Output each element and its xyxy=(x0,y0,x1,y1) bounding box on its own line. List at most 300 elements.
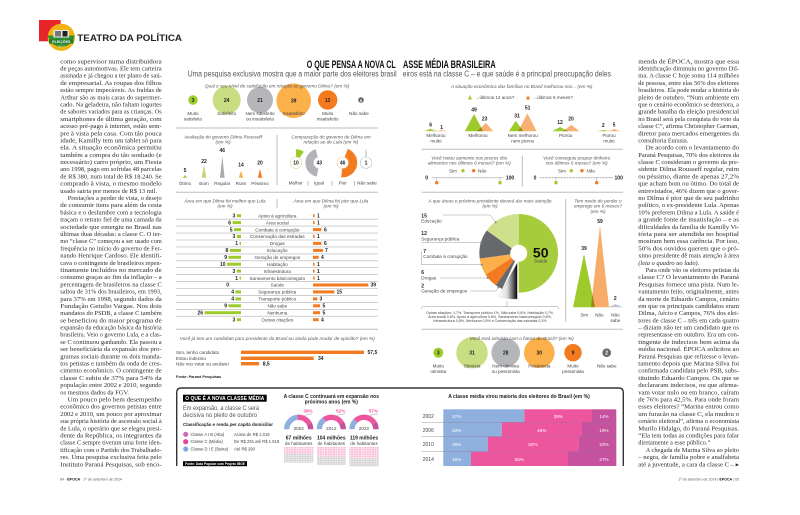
right article column: vantamento feito, originalmente, antes xyxy=(638,289,739,296)
row labels: Não sabe xyxy=(267,304,288,308)
right article column: tituindo Eduardo Campos. Os que se xyxy=(638,375,739,382)
bubble chart: optimism about Brazil's future: otimista xyxy=(430,369,447,374)
right article column: que acham bom ou ótimo. Do total de xyxy=(638,181,739,188)
class legend: Acima de R$ 1.019 xyxy=(234,432,270,437)
bar chart: candidate decision: Estou indeciso xyxy=(176,356,206,361)
left article column: se C continuou ganhando. Ela passou a xyxy=(60,339,162,346)
orange bar values: 1 xyxy=(317,220,320,226)
row labels: Nenhuma xyxy=(267,310,288,315)
infographic subtitle xyxy=(188,69,611,78)
orange bar values: 7 xyxy=(325,248,328,254)
right article column: ou péssimo, diante de apenas 27,2% xyxy=(638,173,740,180)
right article column: dificuldades da família de Kamilly Vi- xyxy=(638,224,739,231)
right article column: tamento depois que Marina Silva foi xyxy=(638,360,739,368)
right article column: de 76% para 42,5%. Para onde foram xyxy=(638,396,740,404)
chart: family economic situation triangles: 51 xyxy=(525,106,531,112)
infographic subtitle: Uma pesquisa exclusiva mostra que a maior parte dos eleitores brasil xyxy=(188,69,397,78)
left article column: traçam o retrato fiel de uma camada da xyxy=(60,217,162,224)
stacked bar chart: middle class majority of voters: 16% xyxy=(452,457,461,462)
bubble chart: satisfaction with Dilma government: satisfeito xyxy=(184,116,203,122)
right article column: classe C”, afirma Christopher Garman, xyxy=(638,123,739,130)
left article column: Fundação Getulio Vargas. Nos dois xyxy=(60,303,162,310)
diverging bar chart: areas Dilma better or worse than Lula: (em %) xyxy=(323,204,339,209)
left article column: de Lula, o operário que se elegeu presi- xyxy=(60,425,162,432)
gauge 2002 xyxy=(287,417,311,429)
orange bar values: 39 xyxy=(370,283,376,289)
green bar values: 1 xyxy=(235,276,238,282)
bubble chart: optimism about Brazil's future: Muito xyxy=(567,364,579,368)
green bar values: 8 xyxy=(226,248,229,254)
chart: class C expansion gauges: de habitantes xyxy=(318,441,346,446)
row labels: Saneamento básico/esgoto xyxy=(249,276,306,281)
bubble chart: satisfaction with Dilma government: Insatisfeito xyxy=(283,111,305,116)
chart: family economic situation triangles: muito xyxy=(603,138,615,143)
chart: family economic situation triangles: ...últimos 12 anos? xyxy=(476,95,515,100)
bubble chart: optimism about Brazil's future: 31 xyxy=(469,350,475,356)
bubble chart: optimism about Brazil's future: 2 xyxy=(605,350,608,356)
spike chart: government evaluation: Ótimo xyxy=(179,180,192,186)
left article column: cado. Na geladeira, não faltam iogurtes xyxy=(60,102,162,108)
orange bar values: 4 xyxy=(321,317,324,323)
panel: what is the new middle class: O QUE É A NOVA CLASSE MÉDIA xyxy=(185,394,265,402)
chart: class C expansion gauges: 67 milhões xyxy=(286,435,312,441)
bubble chart: optimism about Brazil's future: Pessimista xyxy=(528,364,551,368)
right article column: a grande fonte de insatisfação – e as xyxy=(638,217,739,224)
bubble chart: satisfaction with Dilma government: 39 xyxy=(291,98,297,104)
row labels: Outras citações xyxy=(261,317,294,322)
left article column: cimento econômico. O contingente de xyxy=(60,368,162,375)
stacked bar chart: middle class majority of voters: 39% xyxy=(554,414,563,419)
pie chart: priorities for next president: Saúde xyxy=(534,258,548,263)
green bar values: 9 xyxy=(224,255,227,261)
right article column: Paraná Pesquisas, 70% dos eleitores da xyxy=(638,152,739,159)
right article column: ma. A classe C hoje soma 114 milhões xyxy=(638,73,739,80)
right article column: em que os principais candidatos eram xyxy=(638,303,740,310)
orange bar values: 4 xyxy=(321,255,324,261)
bar chart: candidate decision: Sim, tenho candidato xyxy=(176,350,220,355)
left article column: também a compra do tão sonhado (e xyxy=(60,152,162,159)
left article column: usado sairia por menos de R$ 13 mil. xyxy=(60,188,157,195)
pie chart: priorities for next president: (em %) xyxy=(482,204,498,209)
left article column: res. Uma pesquisa exclusiva feita pelo xyxy=(60,454,162,461)
bubble chart: satisfaction with Dilma government: 24 xyxy=(224,98,230,104)
right article column: entrevistados, 46% dizem que o gover- xyxy=(638,188,739,195)
wedge chart: Dilma compared to Lula: Comparação do governo de Dilma em xyxy=(291,134,371,139)
left article column: assinada e já chegou a ter plano de saú- xyxy=(60,73,162,80)
right article column: esses eleitores? “Marina entrou como xyxy=(638,404,740,411)
chart: family economic situation triangles: 1 xyxy=(440,125,443,131)
bubble chart: satisfaction with Dilma government: Nem satisfeito xyxy=(245,111,275,116)
right article column: confirmada candidata pelo PSB, subs- xyxy=(638,368,739,375)
stacked bar chart: middle class majority of voters: 27% xyxy=(599,457,609,462)
chart: family economic situation triangles: Piorou xyxy=(602,133,616,138)
pie labels: Combate à corrupção xyxy=(423,254,468,259)
section heading: TEATRO DA POLÍTICA xyxy=(77,32,182,44)
right article column: identificação diminuiu no governo Dil- xyxy=(638,66,739,72)
pie labels: 12 xyxy=(421,231,427,237)
spike chart: government evaluation xyxy=(179,134,269,186)
bubble chart: optimism about Brazil's future: ou pessimista xyxy=(492,369,520,374)
row labels: Conservação das estradas xyxy=(250,234,305,239)
scale chart: food prices: Não xyxy=(478,168,487,173)
left article column: mandatos do PSDB, a classe C também xyxy=(60,310,163,317)
left article column: mo “classe C” começou a ser usado com xyxy=(60,238,163,245)
right article column: De acordo com o levantamento do xyxy=(646,145,740,152)
green bar values: 26 xyxy=(197,310,203,316)
pie chart: priorities for next president: Outras citações: 1,7%, Transporte público 1%, Não sabe 0,8%, Habitação 0,7%, xyxy=(426,311,554,315)
right article column: que o cenário econômico se deteriora, a xyxy=(638,102,739,108)
chart: family economic situation triangles: 5 xyxy=(613,122,616,128)
right article column: “Ela tem todas as condições para falar xyxy=(638,432,740,440)
right article column: tingente de indecisos bem acima da xyxy=(638,339,739,346)
green bar values: 4 xyxy=(231,297,234,303)
pie chart: priorities for next president: Infraestrutura 0,6%, Nenhuma 0,5% e Conservação das estradas 0,3% xyxy=(433,319,547,323)
bubble chart: optimism about Brazil's future: 30 xyxy=(537,350,542,356)
left article column: os mesmos dados da FGV. xyxy=(60,389,129,396)
right article column: menda de ÉPOCA, mostra que essa xyxy=(638,57,739,65)
chart: class C expansion gauges: 104 milhões xyxy=(317,435,346,441)
right article column: político, o ex-presidente Lula. Apenas xyxy=(638,202,739,209)
chart: family economic situation triangles: Melhorou xyxy=(426,133,446,138)
left article column: tos petistas e também da onda de cres- xyxy=(60,360,162,368)
triangle chart: fear of job loss: Não xyxy=(611,313,620,318)
stacked bar chart: middle class majority of voters xyxy=(422,394,616,466)
class legend xyxy=(183,432,280,452)
spike chart: government evaluation: Avaliação do governo Dilma Rousseff xyxy=(183,134,263,139)
chart: family economic situation triangles: 2 xyxy=(602,123,605,129)
right article column: – diziam não ter um candidato que os xyxy=(637,324,739,332)
pie chart: priorities for next president xyxy=(421,198,558,323)
left article column: smartphones de última geração, com xyxy=(60,116,163,123)
row labels: Segurança pública xyxy=(258,290,297,295)
pie labels: Geração de empregos xyxy=(421,289,468,294)
bar chart: candidate decision: Você já tem um candidato para presidente do Brasil ou ainda pode mudar de opinião? (em %) xyxy=(180,336,375,341)
right article column: um furacão na classe C, ela mudou o xyxy=(638,411,740,418)
bar chart: candidate decision: Não vou votar ou anularei xyxy=(176,362,229,367)
green bar values: 3 xyxy=(233,213,236,219)
panel: what is the new middle class: Em expansão, a classe C será xyxy=(183,405,259,412)
pie labels: 6 xyxy=(421,270,424,276)
right article column: de pessoas, entre elas 56% dos eleitores xyxy=(638,80,739,87)
left article column: Instituto Paraná Pesquisas, sob enco- xyxy=(60,461,162,468)
scale chart: food prices: alimentos nos últimos 6 meses? (em %) xyxy=(428,160,511,165)
bubble chart: satisfaction with Dilma government: 3 xyxy=(192,98,195,104)
left article column: tificação com o Partido dos Trabalhado- xyxy=(60,447,162,454)
right article column: – negra, de família pobre e analfabeta xyxy=(637,454,739,461)
spike chart: government evaluation: 5 xyxy=(184,168,187,174)
chart: family economic situation triangles: 12 xyxy=(557,120,563,126)
left article column: de peças automotivas. Ele tem carteira xyxy=(60,66,162,72)
stacked bar chart: middle class majority of voters: 14% xyxy=(599,414,609,419)
bar chart: candidate decision: 8,5 xyxy=(263,362,270,368)
scale chart: food prices xyxy=(425,155,514,184)
left article column: ser beneficiária da expansão dos pro- xyxy=(60,346,162,353)
right article column: Pesquisas fornece uma pista. Num le- xyxy=(638,281,739,288)
left page footer: 64 · ÉPOCA · 1º de setembro de 2014 xyxy=(60,477,122,482)
row labels: Drogas xyxy=(270,241,285,246)
right article column: mostram bem essa carência. Por isso, xyxy=(638,238,739,245)
wedge chart: Dilma compared to Lula: Não sabe xyxy=(357,181,377,186)
left article column: de consumir itens para além da cesta xyxy=(60,202,162,209)
right article column xyxy=(637,57,740,468)
left article column: classe C subiu de 37% para 54% da xyxy=(60,375,162,382)
right article column: representasse em outubro. Era um con- xyxy=(638,332,739,339)
pie labels: 2 xyxy=(421,284,424,290)
infographic title: ASSE MÉDIA BRASILEIRA xyxy=(403,58,496,71)
left article column: necessário) carro próprio, um Fiesta xyxy=(60,159,162,166)
section badge: Eleições 2014: ELEIÇÕES xyxy=(52,39,71,44)
chart: family economic situation triangles: 49 xyxy=(471,108,477,114)
right article column: sidente Dilma Rousseff regular, ruim xyxy=(638,166,740,173)
left article column: classe C sempre tiveram uma forte iden- xyxy=(60,440,162,447)
stacked bar chart: middle class majority of voters: 33% xyxy=(452,428,461,433)
chart: class C expansion gauges: 2002 xyxy=(294,426,304,431)
orange bar values: 1 xyxy=(317,262,320,268)
scale chart: saving money: nos últimos 6 meses? (em %) xyxy=(546,160,608,165)
right article column: diretor para mercados emergentes da xyxy=(638,130,739,137)
pie chart: priorities for next president: A que áreas o próximo presidente deverá dar mais atenção xyxy=(427,198,552,204)
stacked bar chart: middle class majority of voters: 2006 xyxy=(423,428,434,434)
green bar values: 6 xyxy=(228,220,231,226)
bubble chart: optimism about Brazil's future: Nem otimista xyxy=(492,364,520,368)
gauge 2022 xyxy=(352,417,376,429)
pie chart: priorities for next president: 50 xyxy=(533,245,549,261)
left article column xyxy=(60,58,163,468)
scale chart: food prices: 100 xyxy=(506,175,514,181)
bubble chart: optimism about Brazil's future xyxy=(430,336,617,374)
diverging bar chart: areas Dilma better or worse than Lula: Área em que Dilma foi melhor que Lula xyxy=(183,198,266,204)
stacked bar chart: middle class majority of voters: 46% xyxy=(537,428,546,433)
left article column: cava o contingente de brasileiros repen- xyxy=(60,260,162,267)
wedge chart: Dilma compared to Lula: Pior xyxy=(339,181,347,186)
bubble chart: satisfaction with Dilma government: Satisfeito xyxy=(217,111,237,116)
spike chart: government evaluation: Regular xyxy=(214,181,231,186)
left article column: pre à vista pela casa. Com tão pouca xyxy=(60,130,162,137)
green bar values: 5 xyxy=(230,227,233,233)
left article column: gramas sociais durante os dois manda- xyxy=(60,353,162,360)
green bar values: 9 xyxy=(224,304,227,310)
row labels: Apoio à agricultura xyxy=(258,213,297,218)
chart: class C expansion gauges: 2022 xyxy=(359,426,370,431)
stacked bar chart: middle class majority of voters: 19% xyxy=(599,428,609,433)
orange bar values: 1 xyxy=(317,269,320,275)
right article column: Dilma, Aécio e Campos, 76% dos elei- xyxy=(638,310,739,317)
left article column: sua própria história de ascensão social à xyxy=(60,418,162,425)
bubble chart: satisfaction with Dilma government: Muito xyxy=(187,111,199,116)
chart: family economic situation triangles: 20 xyxy=(568,116,574,122)
right article column: média nacional. ÉPOCA solicitou ao xyxy=(638,345,740,353)
chart: class C expansion gauges: 2012 xyxy=(326,426,337,431)
chart: family economic situation triangles: ...últimos 6 meses? xyxy=(533,95,573,100)
orange bar values: 1 xyxy=(317,234,320,240)
stacked bar chart: middle class majority of voters: 2014 xyxy=(423,457,434,463)
spike chart: government evaluation: 46 xyxy=(220,148,225,154)
right article column: Murilo Hidalgo, do Paraná Pesquisas. xyxy=(638,425,739,432)
left article column: percentagem de brasileiros na classe C xyxy=(60,281,162,288)
scale chart: food prices: Você notou aumento nos preços dos xyxy=(431,155,508,160)
left article column: se beneficiou do maior programa de xyxy=(60,317,162,324)
spike chart: government evaluation: Péssimo xyxy=(251,181,269,186)
scale chart: food prices: 0 xyxy=(425,175,428,181)
left article column: sociedade que emergiu no Brasil nas xyxy=(60,224,162,231)
wedge chart: Dilma compared to Lula: | xyxy=(354,181,355,186)
left article column: de empresarial. As roupas dos filhos xyxy=(60,80,162,87)
pie labels: Educação xyxy=(421,218,442,223)
row labels: Combate à corrupção xyxy=(255,227,300,232)
chart: family economic situation triangles: nem piorou xyxy=(511,138,535,143)
right article column: tória para ser atendida no hospital xyxy=(638,231,739,238)
class legend: Classe A I B (Alta) xyxy=(190,432,225,437)
orange bar values: 15 xyxy=(336,290,342,296)
right article column: declararam indecisos, ou que afirma- xyxy=(638,382,739,389)
left article column: Arthur são as mais caras do supermer- xyxy=(60,94,162,101)
scale chart: saving money: Sim xyxy=(558,168,566,173)
spike chart: government evaluation: 22 xyxy=(201,159,207,165)
panel: what is the new middle class xyxy=(183,394,280,466)
right article column: diretamente a esse público.” xyxy=(638,440,710,447)
right article column: cenário eleitoral”, afirma o economista xyxy=(638,418,739,425)
bubble chart: satisfaction with Dilma government xyxy=(184,83,369,122)
bubble chart: satisfaction with Dilma government: 12 xyxy=(325,98,331,104)
bubble chart: satisfaction with Dilma government: insatisfeito xyxy=(317,116,339,122)
diverging bar chart: areas Dilma better or worse than Lula: (em %) xyxy=(217,204,233,209)
spike chart: government evaluation: Ruim xyxy=(236,181,247,186)
row labels: Habitação xyxy=(267,262,288,267)
right article column: no Brasil será pela conquista do voto da xyxy=(638,116,739,123)
orange bars: worse than Lula xyxy=(313,214,368,321)
right article column: pleito de outubro. “Num ambiente em xyxy=(638,94,740,101)
triangle chart: fear of job loss: 59 xyxy=(597,219,603,225)
stacked bar chart: middle class majority of voters: 56% xyxy=(515,457,524,462)
right article column: 50% dos ouvidos querem que o pró- xyxy=(638,245,739,252)
chart: family economic situation triangles: Piorou xyxy=(559,133,573,138)
spike chart: government evaluation: 20 xyxy=(257,160,263,166)
wedge chart: Dilma compared to Lula: | xyxy=(331,181,333,186)
stacked bar chart: middle class majority of voters: 47% xyxy=(452,414,461,419)
wedge chart: Dilma compared to Lula: | xyxy=(307,181,309,186)
infographic subtitle: eiros está na classe C – e que saúde é a principal preocupação deles xyxy=(403,69,611,78)
right article column: tores de classe C – três em cada quatro xyxy=(638,317,740,324)
orange bar values: 3 xyxy=(320,297,322,303)
scale chart: food prices: Sim xyxy=(449,168,457,173)
orange bar values xyxy=(317,213,376,323)
right article column: classe C consideram o governo da pre- xyxy=(638,159,739,166)
green bar values: 3 xyxy=(233,269,236,275)
bar chart: candidate decision xyxy=(176,336,377,368)
row labels: Infraestrutura xyxy=(264,269,291,274)
triangle chart: fear of job loss: Sim xyxy=(580,313,588,318)
row labels xyxy=(249,213,306,322)
class legend: Até R$ 290 xyxy=(234,446,256,452)
right article column: Para onde vão os eleitores petistas da xyxy=(646,267,739,274)
left article column: dente da República, os integrantes da xyxy=(60,432,162,440)
gauge 2012 xyxy=(319,417,343,429)
stacked bar chart: middle class majority of voters: 2010 xyxy=(423,442,434,448)
left article column: últimas duas décadas: a classe C. O ter- xyxy=(60,231,162,238)
bubble chart: optimism about Brazil's future: 3 xyxy=(437,350,440,356)
left article column: de R$ 380, num total de R$ 18.240. Se xyxy=(60,173,162,180)
pie labels: Drogas xyxy=(421,276,437,281)
orange bar values: 6 xyxy=(324,227,327,233)
pie labels: 7 xyxy=(423,249,426,255)
wedge chart: Dilma compared to Lula xyxy=(289,134,377,186)
right article column: A chegada de Marina Silva ao pleito xyxy=(646,447,740,454)
left article column: comprado à vista, o mesmo modelo xyxy=(60,181,162,188)
wedge chart: Dilma compared to Lula: 46 xyxy=(340,160,346,166)
left article column: saltou de 31% dos brasileiros, em 1993, xyxy=(60,289,162,296)
right article column: 10% preferem Dilma a Lula. A saúde é xyxy=(638,209,739,216)
left article column: Um pouco pelo bem desempenho xyxy=(68,396,162,404)
right article column: Paraná Pesquisas que refizesse o levan- xyxy=(638,353,739,360)
right article column: consultoria Eurasia. xyxy=(638,138,689,144)
scale chart: saving money xyxy=(534,155,623,184)
row labels: Educação xyxy=(267,248,288,253)
class legend: Classe D I E (Baixa) xyxy=(190,446,229,452)
left article column: para 37% em 1998, segundo dados da xyxy=(60,296,162,303)
left article column: idade, Kamilly tem um tablet só para xyxy=(60,138,162,144)
row labels: Área social xyxy=(266,219,289,225)
chart: class C expansion gauges: 119 milhões xyxy=(350,435,378,441)
left article column: nando Henrique Cardoso. Ele identifi- xyxy=(60,253,162,260)
row labels: Geração de empregos xyxy=(254,255,301,260)
green bar values: 1 xyxy=(235,241,238,247)
right article column: vam votar nulo ou em branco, caíram xyxy=(638,389,740,396)
green bar values: 4 xyxy=(231,290,234,296)
orange bar values: 5 xyxy=(322,304,326,310)
chart: class C expansion gauges: 52% xyxy=(336,409,345,414)
stacked bar chart: middle class majority of voters: 26% xyxy=(452,442,461,447)
triangle chart: fear of job loss: 39 xyxy=(581,246,587,252)
left article column: básica e o deslumbre com a tecnologia xyxy=(60,209,162,216)
chart: family economic situation triangles: 23 xyxy=(482,116,488,122)
left article column: expansão da educação básica da história xyxy=(60,324,162,332)
left article column: frequência no início do governo de Fer- xyxy=(60,245,162,252)
bubble chart: optimism about Brazil's future: Otimista xyxy=(464,364,481,368)
left article column: 2002 e 2010, um pouco por aproximar xyxy=(60,411,162,418)
left article column: como supervisor numa distribuidora xyxy=(60,58,162,65)
left article column: Prestações a perder de vista, o desejo xyxy=(68,195,162,202)
left article column: população entre 2002 e 2010, segundo xyxy=(60,382,162,389)
bubble chart: optimism about Brazil's future: Você está otimista com o futuro do Brasil? (em %) xyxy=(470,336,574,341)
right article column: até a juventude, a cara da classe C – ▸ xyxy=(638,461,740,468)
left article column: ano 1998, pago em sofridas 48 parcelas xyxy=(60,166,162,173)
left article column: ela. A situação econômica permitiu xyxy=(60,145,162,152)
panel: what is the new middle class: Fonte: Data Popular com Projeto IBGE xyxy=(185,462,246,466)
green bars: better than Lula xyxy=(205,214,241,321)
chart: class C expansion gauges: próximos anos (em %) xyxy=(305,399,358,405)
row labels: Transporte público xyxy=(258,297,297,302)
wedge chart: Dilma compared to Lula: Melhor xyxy=(289,181,303,186)
triangle chart: fear of job loss: (em %) xyxy=(590,209,606,214)
left article column: tinamente incluídos no mercado de xyxy=(60,267,162,274)
right article column: no Dilma é pior que de seu padrinho xyxy=(638,195,740,202)
row labels: Saúde xyxy=(271,283,284,288)
bubble chart: satisfaction with Dilma government: 21 xyxy=(257,98,263,104)
right page footer: 1º de setembro de 2014 | ÉPOCA | 65 xyxy=(678,477,739,482)
chart: family economic situation triangles: 31 xyxy=(514,114,520,120)
diverging bar chart: areas Dilma better or worse than Lula xyxy=(176,198,378,323)
chart: family economic situation triangles xyxy=(422,84,623,143)
chart: family economic situation triangles: 6 xyxy=(429,122,432,128)
right article column: ximo presidente dê mais atenção à área xyxy=(638,253,739,260)
bubble chart: optimism about Brazil's future: 28 xyxy=(503,350,509,356)
chart: class C expansion gauges: A classe C continuará em expansão nos xyxy=(284,394,379,400)
wedge chart: Dilma compared to Lula: 1 xyxy=(365,160,368,166)
triangle chart: fear of job loss xyxy=(573,198,623,323)
bubble chart: satisfaction with Dilma government: Qual o seu nível de satisfação em relação ao governo Dilma? (em %) xyxy=(205,84,350,88)
green bar values: 10 xyxy=(220,262,226,268)
bar chart: candidate decision: 57,5 xyxy=(368,350,377,356)
